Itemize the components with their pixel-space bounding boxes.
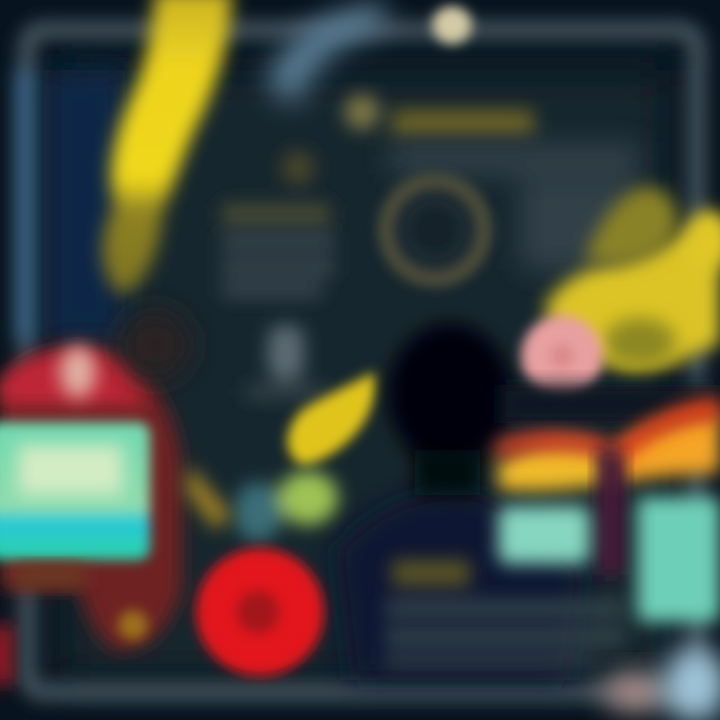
blue ribbon top <box>266 2 385 105</box>
yellow cloud right <box>545 187 720 372</box>
right building <box>495 385 720 720</box>
top badge <box>432 6 472 44</box>
donut chart <box>385 180 485 280</box>
bottom text block <box>385 560 625 667</box>
red wheel <box>196 548 324 676</box>
dark circle behind machine <box>119 309 191 381</box>
small icon center left <box>245 325 325 399</box>
text block left column <box>222 232 334 298</box>
pink circle <box>521 315 603 397</box>
silhouette figure <box>335 323 585 680</box>
red machine left <box>0 346 232 685</box>
text block right column <box>390 143 640 270</box>
small heading left column <box>222 151 330 226</box>
heading marker and title <box>344 94 534 136</box>
yellow ribbon upper left <box>103 0 232 295</box>
green and teal orb <box>234 471 338 542</box>
yellow ribbon center <box>287 372 375 466</box>
